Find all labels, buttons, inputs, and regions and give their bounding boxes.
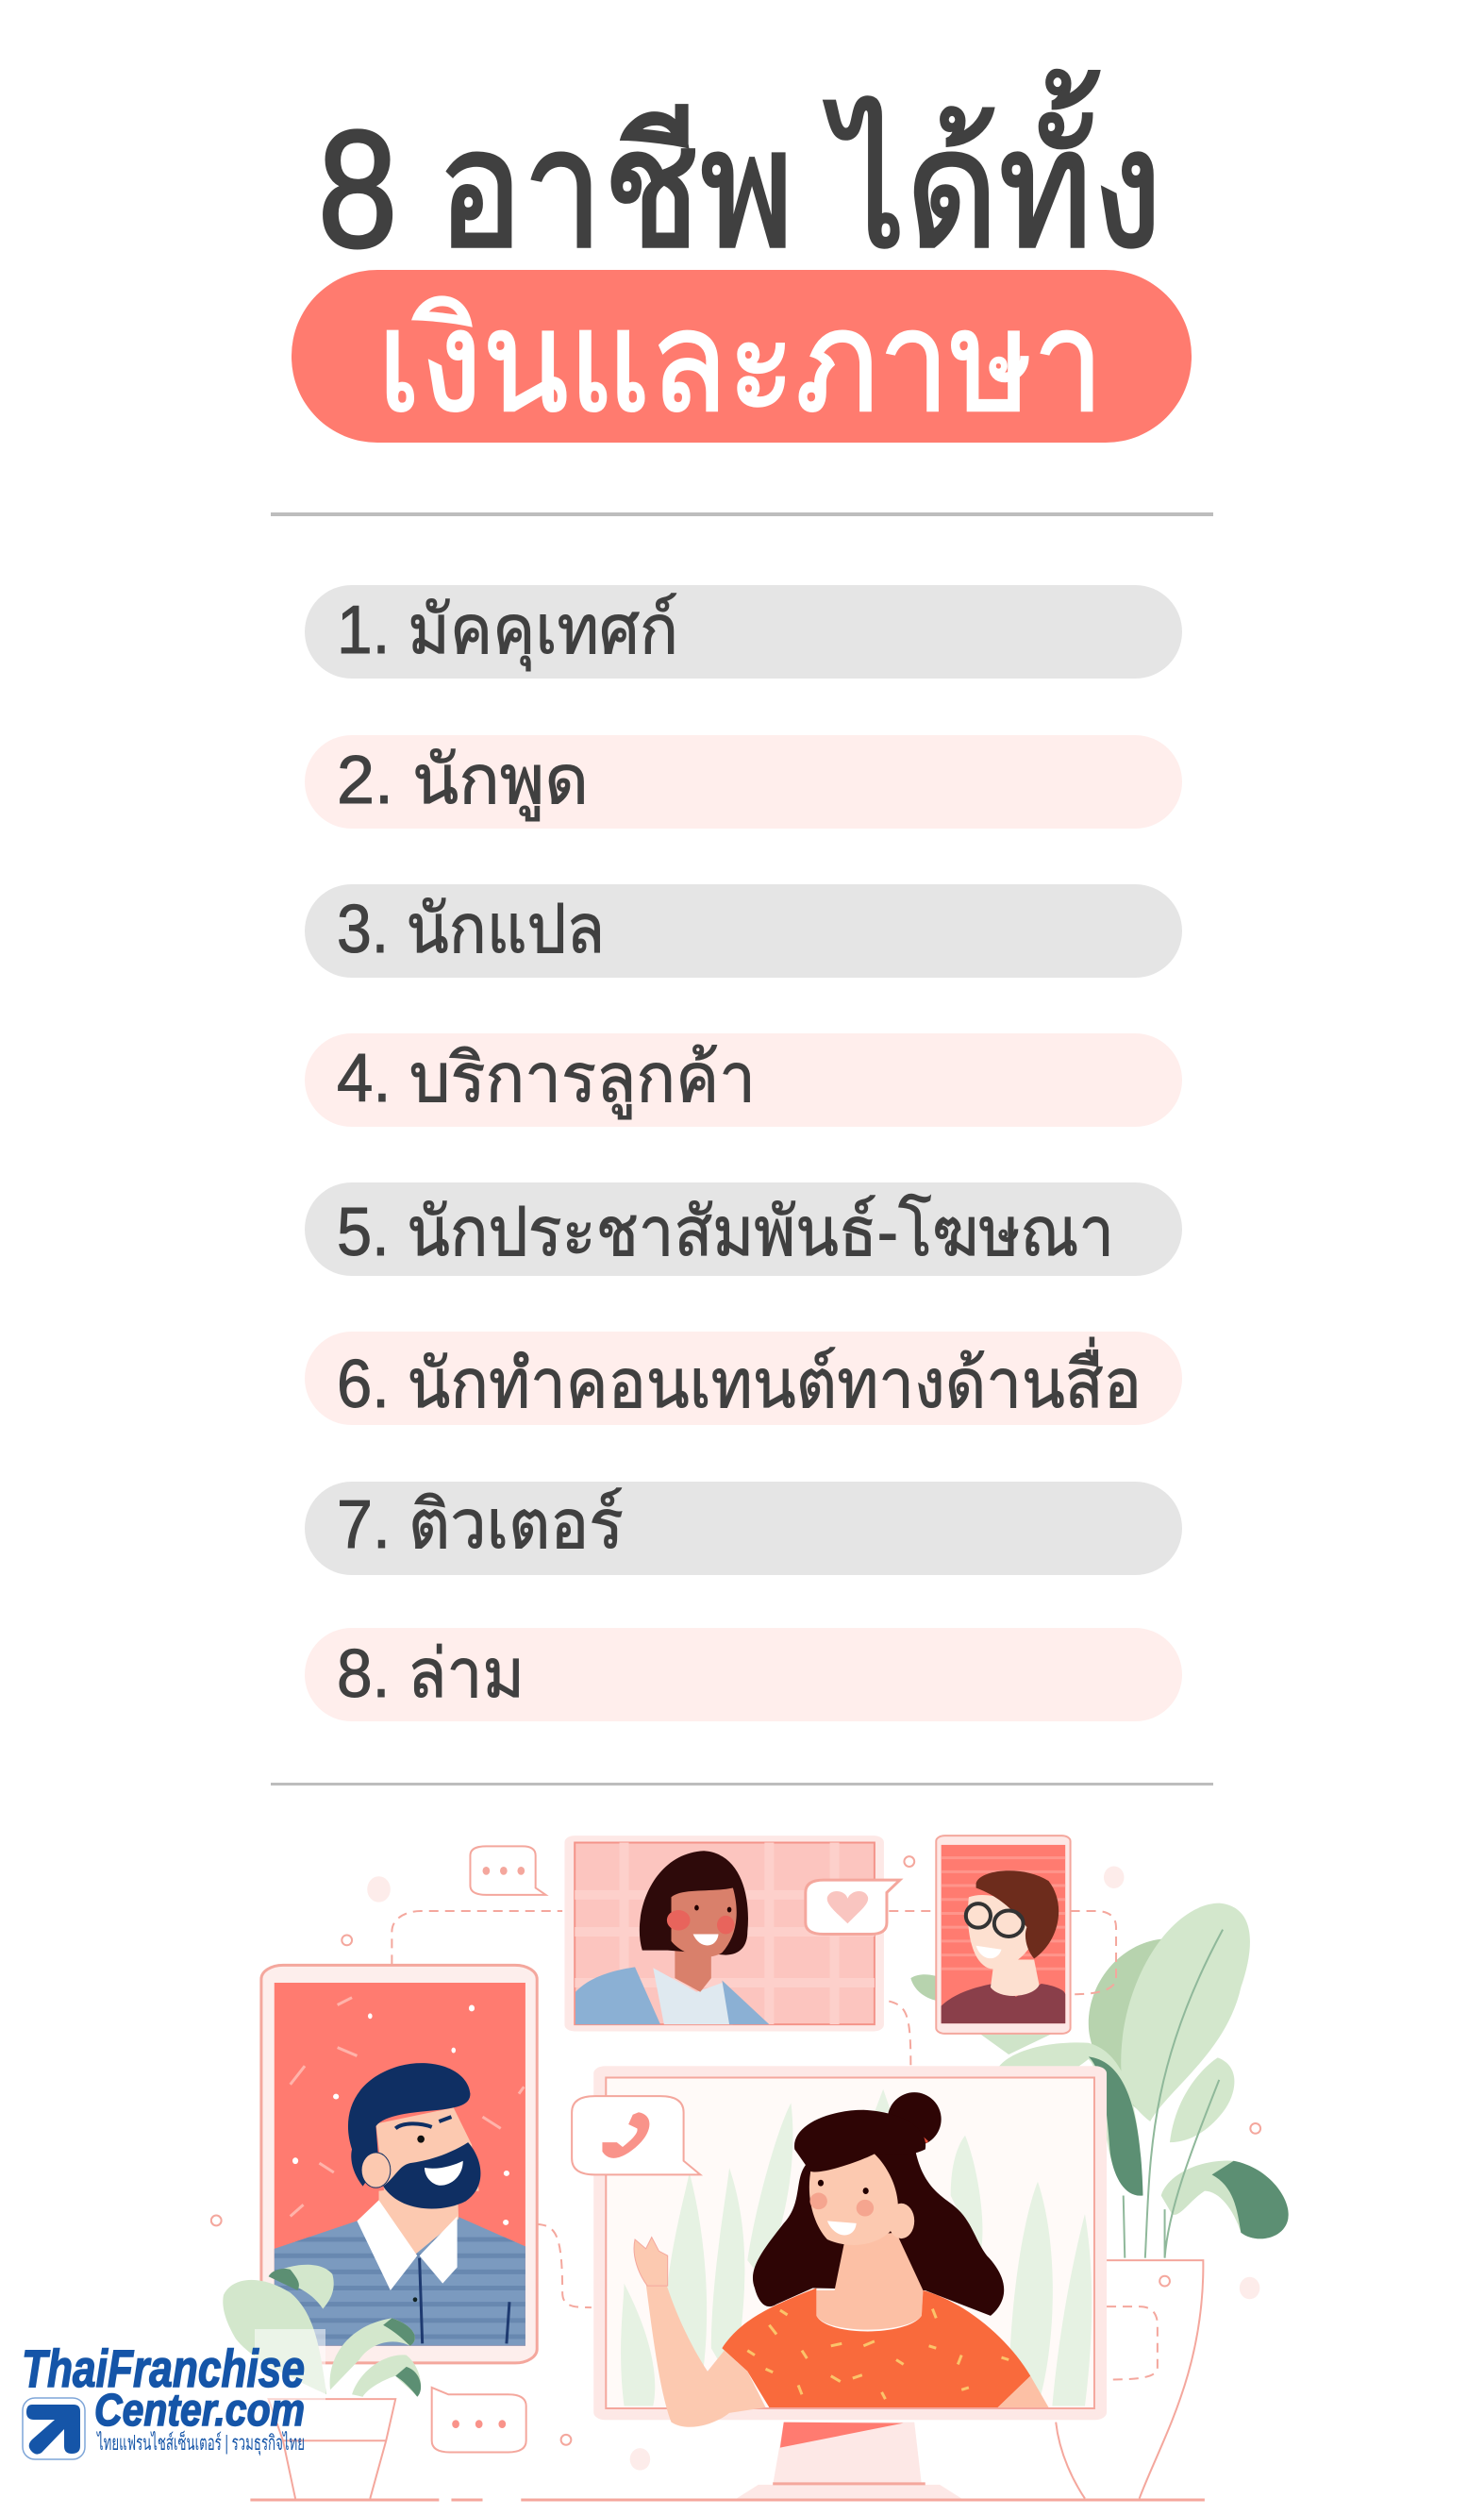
list item 4: 4. บริการลูกค้า — [337, 1041, 756, 1119]
speech bubble: phone — [572, 2096, 700, 2174]
plant pot: left — [269, 2399, 395, 2499]
list item 2 — [305, 735, 1182, 829]
plant: right — [910, 1903, 1289, 2258]
logo: ThaiFranchise Center.com: ไทยแฟรนไชส์เซ็นเตอร์ | รวมธุรกิจไทย — [96, 2429, 305, 2456]
list item 5: 5. นักประชาสัมพันธ์-โฆษณา — [337, 1193, 1114, 1270]
list item 2: 2. นักพูด — [337, 743, 589, 821]
speech bubble: dots bottom — [432, 2388, 526, 2453]
monitor stand — [737, 2423, 961, 2499]
list item 3 — [305, 884, 1182, 978]
decorative rings and dots — [211, 1856, 1260, 2471]
logo: ThaiFranchise Center.com: Center.com — [94, 2386, 305, 2436]
phone: man with glasses — [936, 1836, 1071, 2034]
list item 8: 8. ล่าม — [337, 1636, 525, 1712]
logo: ThaiFranchise Center.com — [22, 2329, 325, 2459]
list item 1: 1. มัคคุเทศก์ — [337, 593, 678, 671]
speech bubble: dots — [470, 1846, 545, 1895]
video card: woman with bob hair — [564, 1836, 884, 2031]
list item 8 — [305, 1628, 1182, 1721]
dashed connectors — [392, 1911, 1158, 2380]
list item 1 — [305, 585, 1182, 679]
tablet: bearded man — [261, 1965, 537, 2363]
title pill: เงินและภาษา — [377, 282, 1104, 441]
monitor: woman waving — [593, 2066, 1107, 2427]
title: 8 อาชีพ ได้ทั้ง — [318, 70, 1162, 282]
plant pot: right — [1056, 2260, 1203, 2499]
list item 4 — [305, 1033, 1182, 1127]
icon: arrow — [23, 2398, 85, 2459]
list item 6: 6. นักทำคอนเทนต์ทางด้านสื่อ — [337, 1337, 1142, 1422]
list item 7: 7. ติวเตอร์ — [337, 1487, 624, 1563]
illustration: video call — [211, 1836, 1289, 2500]
logo: ThaiFranchise Center.com: ThaiFranchise — [22, 2339, 305, 2398]
list item 3: 3. นักแปล — [337, 892, 605, 967]
speech bubble: heart — [806, 1880, 900, 1935]
list item 7 — [305, 1482, 1182, 1575]
plant: left — [223, 2265, 421, 2397]
floor line — [250, 2499, 1205, 2502]
